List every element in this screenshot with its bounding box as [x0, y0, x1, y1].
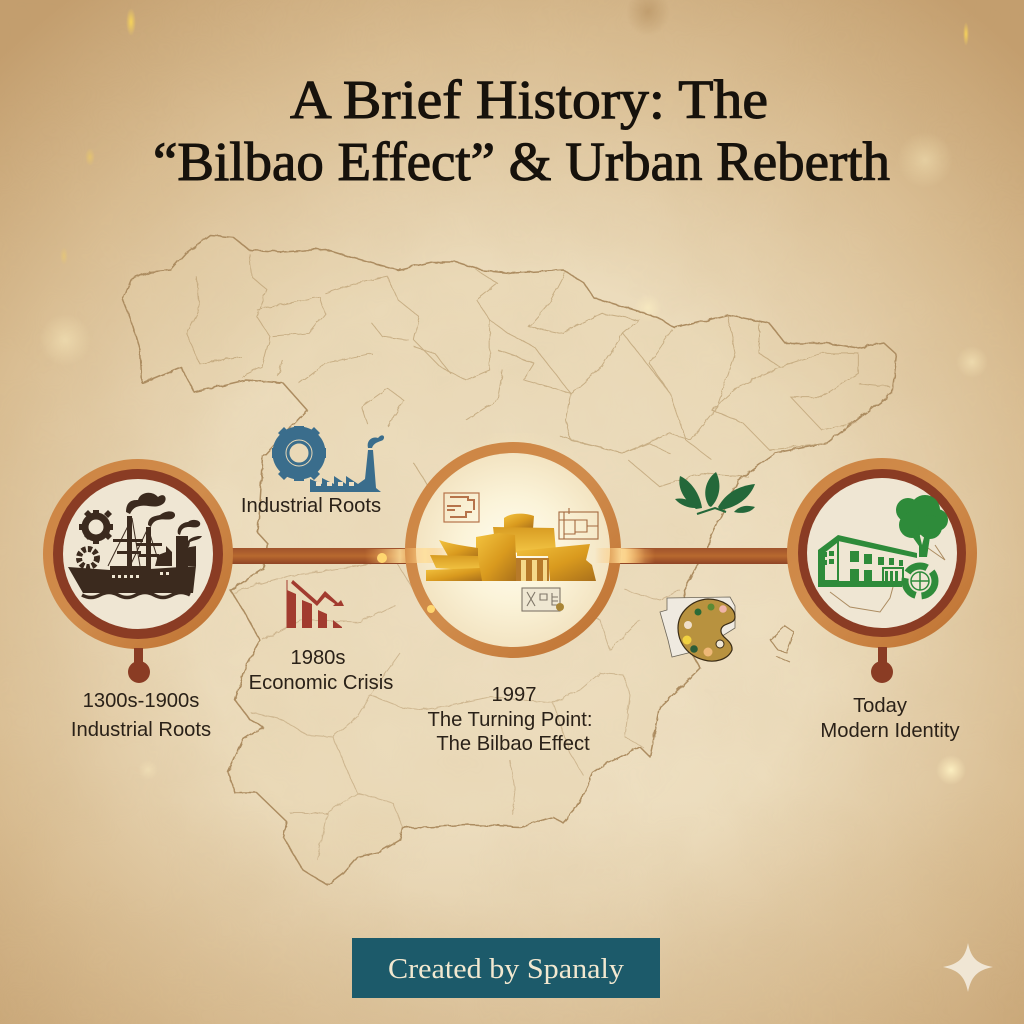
- label: 1980s economic crisis: 1980s: [290, 647, 346, 669]
- icon: blueprint left: [444, 493, 479, 522]
- icon: falling chart: [287, 580, 344, 628]
- label: 1300s-1900s: Industrial Roots: [71, 719, 211, 741]
- icon: gold museum: [426, 514, 596, 581]
- map of Spain: [123, 235, 897, 885]
- credit button: [352, 938, 660, 998]
- label: 1997 turning point: 1997: [492, 684, 536, 706]
- node: modern identity: [787, 458, 977, 683]
- credit button: Created by Spanaly: [388, 954, 624, 985]
- label: 1997 turning point: The Bilbao Effect: [436, 733, 590, 755]
- node: turning point: [400, 442, 645, 658]
- label: today modern identity: Today: [853, 695, 908, 717]
- icon: green leaves: [675, 472, 755, 514]
- coastline and border: [123, 235, 897, 885]
- icon: palette with paper: [660, 597, 735, 661]
- icon: ship with gears: [68, 493, 202, 598]
- icon: blue gear and factory: [272, 426, 384, 492]
- title: [153, 69, 890, 192]
- icon: blueprint right: [559, 508, 598, 539]
- node: industrial roots: [43, 459, 233, 683]
- label: 1980s economic crisis: Economic Crisis: [249, 672, 393, 694]
- icon: blueprint bottom: [522, 588, 564, 611]
- islands: [770, 626, 794, 662]
- timeline connector: [232, 548, 790, 564]
- regional lines north: [186, 253, 890, 500]
- title: “Bilbao Effect” & Urban Reberth: [153, 131, 890, 192]
- label: today modern identity: Modern Identity: [820, 720, 960, 742]
- title: A Brief History: The: [290, 69, 768, 130]
- icon: green building, tree and recycling: [818, 495, 948, 596]
- label: 1300s-1900s: 1300s-1900s: [83, 690, 199, 712]
- label: industrial roots: Industrial Roots: [241, 495, 381, 517]
- icon: sparkle: [943, 943, 993, 992]
- regional lines south: [233, 560, 680, 860]
- label: 1997 turning point: The Turning Point:: [428, 709, 592, 731]
